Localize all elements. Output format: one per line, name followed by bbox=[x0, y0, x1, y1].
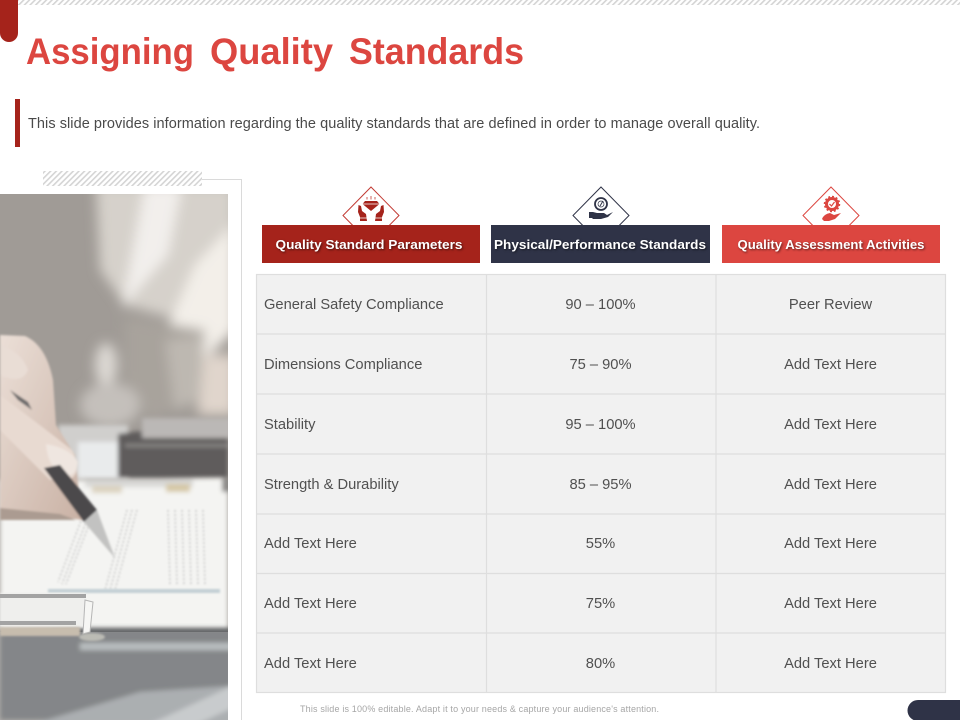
icon: hand with gauge bbox=[573, 187, 629, 244]
row: 80%: Add Text Here bbox=[784, 656, 877, 672]
intro accent bar bbox=[15, 99, 20, 147]
row: General Safety Compliance: General Safety Compliance bbox=[264, 297, 444, 313]
row: 80%: 80% bbox=[586, 656, 615, 672]
row: Dimensions Compliance bbox=[264, 357, 877, 373]
title: Standards bbox=[349, 31, 524, 72]
row: 55%: Add Text Here bbox=[264, 536, 357, 552]
row: Strength & Durability: 85 – 95% bbox=[569, 477, 632, 493]
row: Dimensions Compliance: 75 – 90% bbox=[569, 357, 632, 373]
header: Quality Assessment Activities: Quality Assessment Activities bbox=[738, 237, 924, 252]
hatched strip above photo bbox=[43, 171, 202, 186]
row: General Safety Compliance: Peer Review bbox=[789, 297, 873, 313]
header: Quality Standard Parameters bbox=[262, 225, 480, 263]
row: Stability bbox=[264, 417, 877, 433]
icon: hands holding diamond bbox=[343, 187, 399, 244]
row: General Safety Compliance: 90 – 100% bbox=[565, 297, 636, 313]
row: Stability: Stability bbox=[264, 417, 316, 433]
row: Strength & Durability bbox=[264, 477, 877, 493]
title bbox=[26, 31, 524, 72]
footer note: This slide is 100% editable. Adapt it to your needs & capture your audience's attention. bbox=[300, 704, 659, 714]
photo frame line bbox=[202, 180, 242, 720]
header: Physical/Performance Standards bbox=[491, 225, 710, 263]
row: 55%: Add Text Here bbox=[784, 536, 877, 552]
photo: printed figures bbox=[58, 510, 205, 590]
icon: hand with gear badge bbox=[803, 187, 859, 244]
intro text: This slide provides information regarding the quality standards that are defined in order to manage overall quality. bbox=[28, 116, 760, 132]
row: Strength & Durability: Add Text Here bbox=[784, 477, 877, 493]
title: Assigning bbox=[26, 31, 194, 72]
row: 75%: Add Text Here bbox=[264, 596, 357, 612]
quality standards table bbox=[256, 274, 946, 693]
row: Strength & Durability: Strength & Durability bbox=[264, 477, 399, 493]
title: Quality bbox=[210, 31, 333, 72]
row: Dimensions Compliance: Add Text Here bbox=[784, 357, 877, 373]
row: 75% bbox=[264, 596, 877, 612]
column icons and headers bbox=[262, 187, 940, 263]
row: 80% bbox=[264, 656, 877, 672]
header: Physical/Performance Standards: Physical/Performance Standards bbox=[494, 237, 706, 252]
row: 75%: 75% bbox=[586, 596, 615, 612]
red corner tab bbox=[0, 0, 18, 42]
header: Quality Standard Parameters: Quality Standard Parameters bbox=[276, 237, 462, 252]
page number tab bbox=[908, 700, 960, 720]
row: Dimensions Compliance: Dimensions Compliance bbox=[264, 357, 422, 373]
row: General Safety Compliance bbox=[264, 297, 873, 313]
photo: clipboard clip bbox=[0, 593, 105, 641]
top hatched strip bbox=[18, 0, 960, 5]
row: 75%: Add Text Here bbox=[784, 596, 877, 612]
photo: hand and pen bbox=[0, 335, 115, 558]
row: Stability: Add Text Here bbox=[784, 417, 877, 433]
photo: hand with pen over document bbox=[0, 185, 235, 720]
row: Stability: 95 – 100% bbox=[565, 417, 636, 433]
row: 55%: 55% bbox=[586, 536, 615, 552]
header: Quality Assessment Activities bbox=[722, 225, 940, 263]
row: 55% bbox=[264, 536, 877, 552]
row: 80%: Add Text Here bbox=[264, 656, 357, 672]
